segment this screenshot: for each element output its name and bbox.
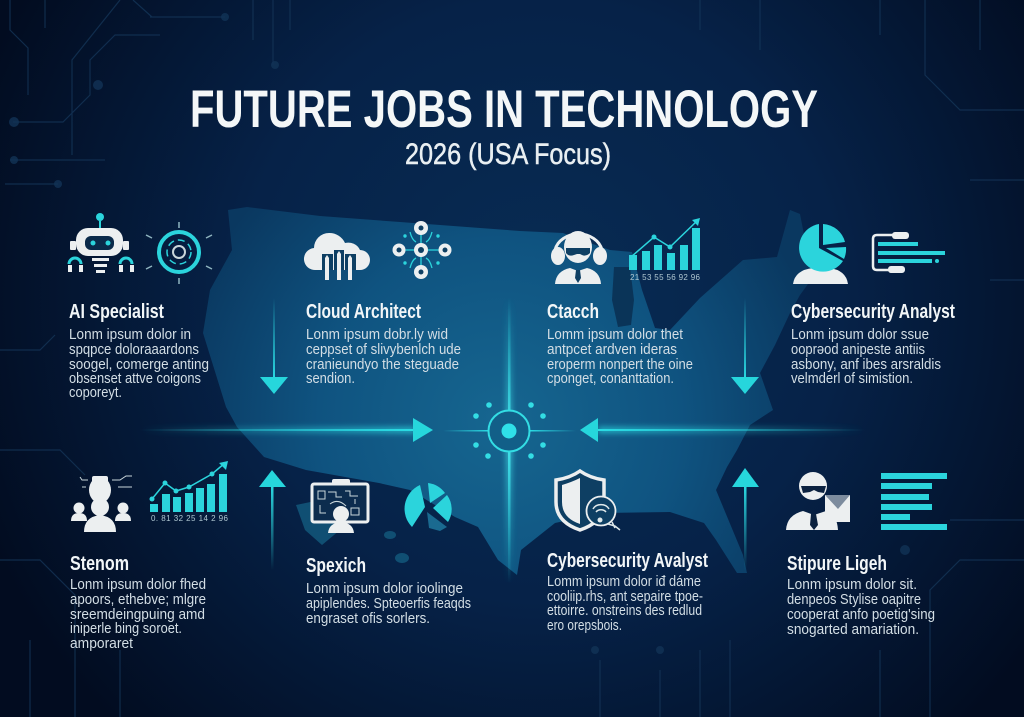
description: Lomm ipsum dolor thet bbox=[547, 327, 683, 343]
description: Lonm ipsum dobr.ly wid bbox=[306, 327, 448, 343]
description: ooprəod anipeste antiis bbox=[791, 342, 925, 358]
description: ettoirre. onstreins des redlud bbox=[547, 603, 702, 619]
description: obsenset attve coigons bbox=[69, 371, 201, 387]
icon: team bbox=[71, 476, 132, 532]
alaska and hawaii islands bbox=[296, 500, 409, 563]
description bbox=[547, 574, 703, 634]
description bbox=[791, 327, 941, 387]
heading: Stipure Ligeh bbox=[787, 553, 887, 575]
icon: screen with person bbox=[312, 479, 368, 533]
icon: target ring bbox=[146, 222, 212, 284]
chart: bars and trend: 21 53 55 56 92 96 bbox=[630, 273, 701, 282]
description: asbony, anf ibes arsraldis bbox=[791, 357, 941, 373]
arrow: center left bbox=[140, 418, 433, 442]
icon: cloud bbox=[304, 233, 370, 280]
chart: bars and trend bbox=[150, 461, 229, 523]
icon: data list bbox=[873, 232, 945, 273]
description: denpeos Stylise oapitre bbox=[787, 592, 921, 608]
description: snogarted amariation. bbox=[787, 622, 919, 638]
arrow: bottom right up bbox=[732, 468, 759, 570]
subtitle: 2026 (USA Focus) bbox=[405, 138, 611, 171]
description: iniperle bing soroet. bbox=[70, 621, 182, 637]
description: Lonm ipsum dolor sit. bbox=[787, 577, 917, 593]
icon: agent with envelope bbox=[786, 472, 850, 530]
description: antpcet ardven ideras bbox=[547, 342, 677, 358]
description: Lonm ipsum dolor ssue bbox=[791, 327, 929, 343]
panel: Stipure Ligeh bbox=[786, 472, 947, 638]
heading: Ctacch bbox=[547, 301, 599, 323]
description bbox=[547, 327, 693, 387]
description: soogel, comerge anting bbox=[69, 357, 209, 373]
description: apoors, ethebve; mlgre bbox=[70, 592, 206, 608]
heading: Spexich bbox=[306, 555, 366, 577]
description: engraset ofis sorlers. bbox=[306, 611, 430, 627]
arrow: top left down bbox=[260, 298, 288, 394]
icon: pie chart bbox=[405, 483, 452, 531]
description: ero orepsbois. bbox=[547, 618, 622, 634]
description: eroperm nonpert the oine bbox=[547, 357, 693, 373]
description bbox=[787, 577, 935, 638]
arrow: center right bbox=[580, 418, 865, 442]
panel: Ctacch bbox=[547, 218, 701, 387]
description: Lonm ipsum dolor ioolinge bbox=[306, 581, 463, 597]
description: cponget, conanttation. bbox=[547, 371, 674, 387]
panel: AI Specialist bbox=[68, 213, 212, 401]
map of the USA bbox=[203, 207, 824, 575]
icon: bars list bbox=[881, 473, 947, 530]
description: spqpce doloraaardons bbox=[69, 342, 199, 358]
description: Lonm ipsum dolor in bbox=[69, 327, 191, 343]
heading: Stenom bbox=[70, 553, 129, 575]
description bbox=[69, 327, 209, 401]
great lakes bbox=[612, 267, 634, 327]
description: sendion. bbox=[306, 371, 355, 387]
description: cooperat anfo poetig'sing bbox=[787, 607, 935, 623]
panel: Cloud Architect bbox=[304, 221, 461, 387]
description bbox=[306, 581, 471, 627]
panel: Spexich bbox=[306, 479, 471, 627]
central target bbox=[443, 298, 576, 583]
description: Lonm ipsum dolor fhed bbox=[70, 577, 206, 593]
description bbox=[306, 327, 461, 387]
icon: network hub bbox=[392, 221, 452, 279]
panel: Stenom bbox=[70, 461, 229, 652]
description: amporaret bbox=[70, 636, 133, 652]
heading: Cloud Architect bbox=[306, 301, 421, 323]
icon: person with headset bbox=[551, 231, 607, 284]
description: apiplendes. Spteoerfis feaqds bbox=[306, 596, 471, 612]
description: Lomm ipsum dolor iđ dáme bbox=[547, 574, 701, 590]
description: coporeyt. bbox=[69, 385, 122, 401]
description: cooliip.rhs, ant sepaire tpoe- bbox=[547, 589, 703, 605]
icon: robot bbox=[68, 213, 134, 273]
title: FUTURE JOBS IN TECHNOLOGY bbox=[190, 80, 818, 139]
chart: bars and trend: 0. 81 32 25 14 2 96 bbox=[151, 514, 229, 523]
icon: pie-head person bbox=[793, 224, 848, 284]
description: cranieundyo the steguade bbox=[306, 357, 459, 373]
arrow: top right down bbox=[731, 298, 759, 394]
description: velmderl of simistion. bbox=[791, 371, 913, 387]
heading: Cybersecurity Avalyst bbox=[547, 550, 708, 572]
panel: Cybersecurity Analyst (top) bbox=[791, 224, 955, 387]
panel: Cybersecurity Analyst (bottom) bbox=[547, 471, 708, 634]
icon: shield with badge bbox=[556, 471, 620, 530]
description: sreemdeingpuing amd bbox=[70, 607, 205, 623]
chart: bars and trend bbox=[629, 218, 701, 282]
description: ceppset of slivybenlch ude bbox=[306, 342, 461, 358]
description bbox=[70, 577, 206, 652]
arrow: bottom left up bbox=[259, 470, 286, 570]
heading: AI Specialist bbox=[69, 301, 164, 323]
heading: Cybersecurity Analyst bbox=[791, 301, 955, 323]
